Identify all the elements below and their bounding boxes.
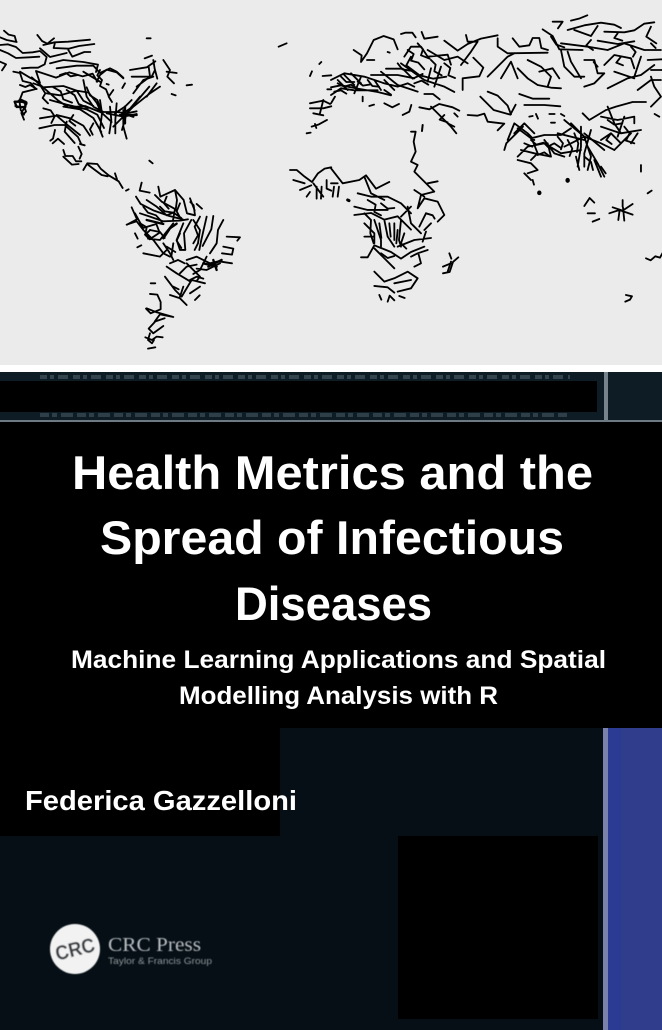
logo: CRC Press: CRC Press	[108, 934, 201, 956]
map: river networks of Eurasia, Africa and Oceania	[331, 15, 662, 302]
panel: author block	[0, 728, 280, 836]
panel: dark cover band	[0, 372, 662, 422]
heading: subtitle: Machine Learning Applications and Spatial	[71, 646, 606, 674]
heading: subtitle: Modelling Analysis with R	[179, 682, 498, 710]
panel: black redaction box	[398, 836, 598, 1019]
author name: Federica Gazzelloni	[25, 785, 297, 816]
logo: CRC Press: Taylor & Francis Group	[108, 956, 212, 966]
heading: subtitle	[71, 646, 606, 710]
panel: title and subtitle block	[0, 422, 662, 728]
heading: main title: Diseases	[235, 577, 432, 630]
heading: main title: Spread of Infectious	[100, 511, 564, 564]
heading: main title	[72, 446, 593, 630]
divider: white band under the map	[0, 365, 662, 372]
panel: blue spine	[603, 728, 662, 1030]
map: river networks of the Americas	[0, 31, 331, 349]
logo: CRC Press	[50, 924, 212, 974]
panel: world river map	[0, 0, 662, 365]
heading: main title: Health Metrics and the	[72, 446, 593, 499]
logo: CRC Press: CRC	[53, 934, 97, 965]
